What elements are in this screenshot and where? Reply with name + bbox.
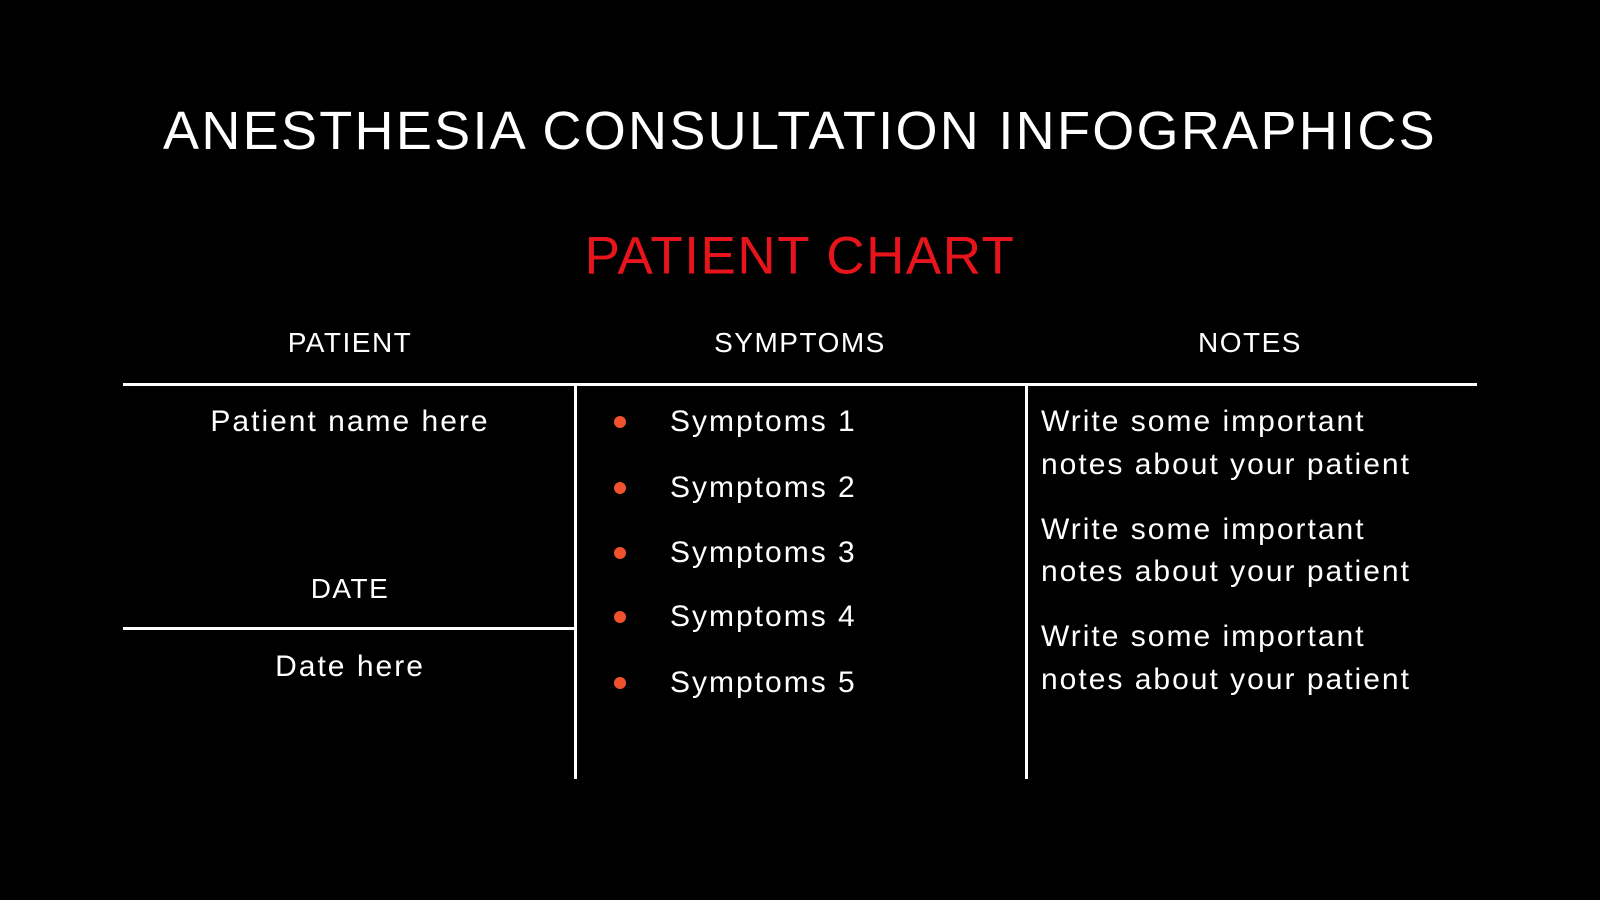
- symptoms list: Symptoms 3: [670, 536, 857, 569]
- notes: [1041, 405, 1411, 696]
- notes: Write some important: [1041, 620, 1366, 653]
- header: notes: NOTES: [1198, 327, 1302, 358]
- header: symptoms: SYMPTOMS: [714, 327, 886, 358]
- table: patient chart: [123, 327, 1477, 779]
- symptoms list: Symptoms 4: [670, 600, 857, 633]
- symptoms list: Symptoms 1: [670, 405, 857, 438]
- notes: Write some important: [1041, 405, 1366, 438]
- symptoms list: Symptoms 5: [670, 666, 857, 699]
- notes: Write some important: [1041, 513, 1366, 546]
- date label: DATE: [311, 573, 389, 604]
- notes: notes about your patient: [1041, 448, 1411, 481]
- notes: notes about your patient: [1041, 663, 1411, 696]
- date value: Date here: [275, 650, 425, 683]
- subtitle: patient chart: PATIENT CHART: [585, 226, 1015, 286]
- header: patient: PATIENT: [288, 327, 412, 358]
- notes: notes about your patient: [1041, 555, 1411, 588]
- title: ANESTHESIA CONSULTATION INFOGRAPHICS: [163, 101, 1437, 161]
- symptoms list: [614, 405, 857, 699]
- patient name: Patient name here: [210, 405, 490, 438]
- symptoms list: Symptoms 2: [670, 471, 857, 504]
